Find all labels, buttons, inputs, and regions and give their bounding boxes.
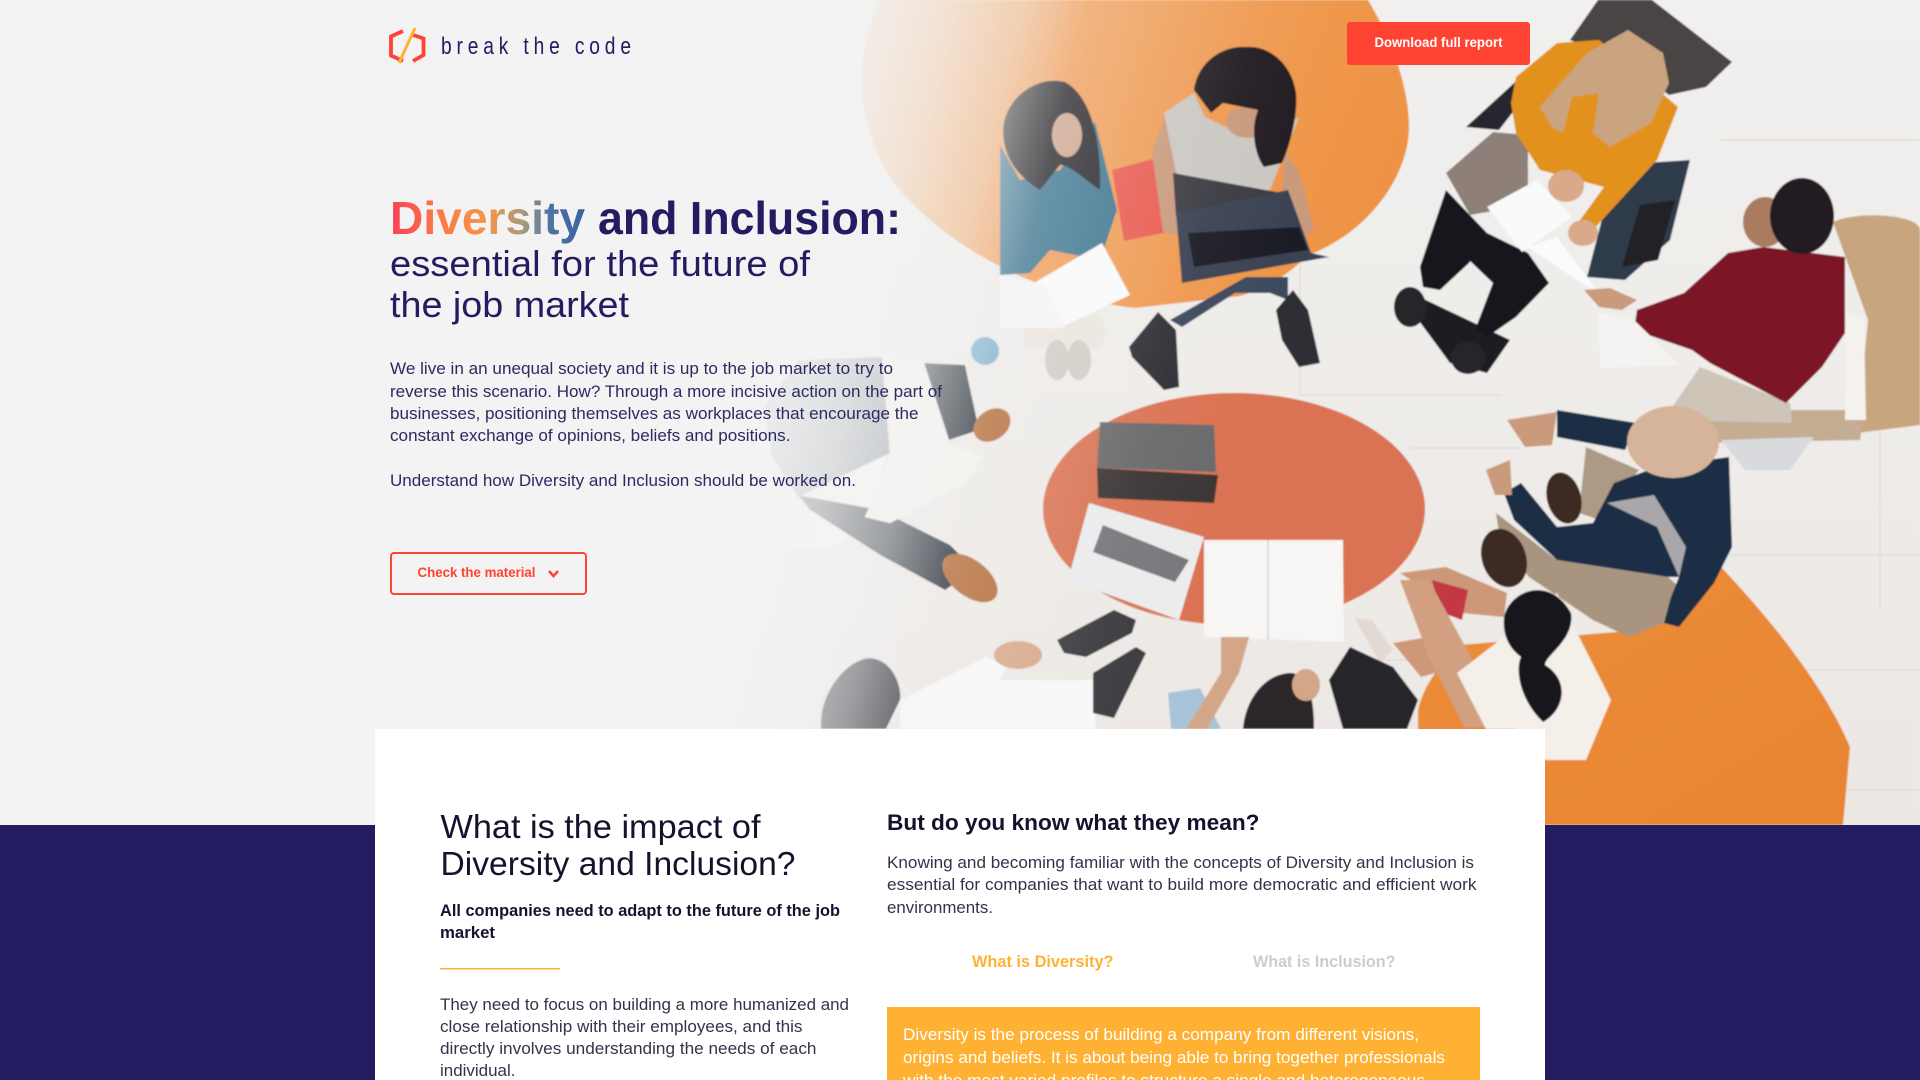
logo mark [391,28,424,63]
hero photo: team meeting seen from above [0,0,1920,825]
concepts paragraph: environments. [887,899,993,917]
wheelchair backrest and frame [1446,0,1732,280]
impact paragraph: They need to focus on building a more humanized and [440,996,849,1014]
impact paragraph: directly involves understanding the needs of each [440,1040,816,1058]
panel: white content card [375,729,1545,1080]
impact heading [440,808,796,882]
amber divider [440,968,560,970]
definition text: Diversity is the process of building a company from different visions, [903,1026,1419,1044]
impact paragraph: close relationship with their employees, and this [440,1018,802,1036]
impact paragraph: individual. [440,1062,516,1080]
tab: what is inclusion: What is Inclusion? [1253,953,1396,971]
orange armchair, bottom [1418,567,1850,825]
title line 2: essential for the future of [390,243,811,284]
impact heading: Diversity and Inclusion? [440,845,796,882]
dark laptop on table [1097,422,1218,503]
round coffee table [1043,393,1425,625]
hero intro text [390,360,942,490]
hero intro text: We live in an unequal society and it is up to the job market to try to [390,360,893,378]
hero intro text: constant exchange of opinions, beliefs and positions. [390,427,790,445]
woman with ponytail [1354,567,1611,760]
check the material button [391,553,586,594]
definition text: origins and beliefs. It is about being able to bring together professionals [903,1049,1445,1067]
hero intro text: businesses, positioning themselves as workplaces that encourage the [390,405,918,423]
hero intro text: reverse this scenario. How? Through a more incisive action on the part of [390,383,942,401]
amber definition box [887,1007,1480,1080]
logo wordmark: break the code [441,32,631,60]
cup on floor [971,337,999,365]
impact subheading: All companies need to adapt to the future of the job [440,902,840,920]
concepts paragraph: essential for companies that want to build more democratic and efficient work [887,876,1477,894]
icon: chevron down [549,571,558,576]
silver laptop on table [1068,503,1204,620]
concepts paragraph [887,854,1477,917]
seated woman with laptop [1129,47,1329,390]
open notebook on table [1204,540,1344,642]
logo: break the code [391,28,631,63]
title line 3: the job market [390,284,629,325]
man at bottom left with white shirt [821,610,1146,729]
title line 1: Diversity [390,192,585,244]
red folder [1112,157,1168,241]
download button: Download full report [1374,34,1503,50]
orange armchair, top [862,0,1409,308]
title line 1 [390,192,901,244]
concepts heading: But do you know what they mean? [887,810,1260,835]
seated woman with blue blouse [1000,81,1130,380]
navy band [0,825,1920,1080]
impact paragraph [440,996,849,1080]
hero title [390,192,901,325]
tan chair, right [1660,215,1920,470]
seated man with white shirt, left [683,348,1017,612]
impact heading: What is the impact of [440,808,761,845]
floor [0,0,1920,825]
title line 1: and Inclusion: [598,192,901,244]
black backpack [1329,647,1418,729]
bald man with navy jacket [1473,406,1732,637]
white fade overlay from the left [0,0,1400,825]
definition text [902,1026,1445,1080]
impact subheading: market [440,924,496,942]
concepts paragraph: Knowing and becoming familiar with the concepts of Diversity and Inclusion is [887,854,1474,872]
hero intro text: Understand how Diversity and Inclusion should be worked on. [390,472,856,490]
woman in wheelchair with orange sweater [1394,30,1678,374]
tab: what is diversity: What is Diversity? [972,953,1114,971]
impact subheading [440,902,840,942]
download button [1347,22,1530,65]
check the material button: Check the material [418,564,536,580]
man in red shirt [1584,178,1845,423]
man sitting at bottom centre [1168,637,1320,729]
